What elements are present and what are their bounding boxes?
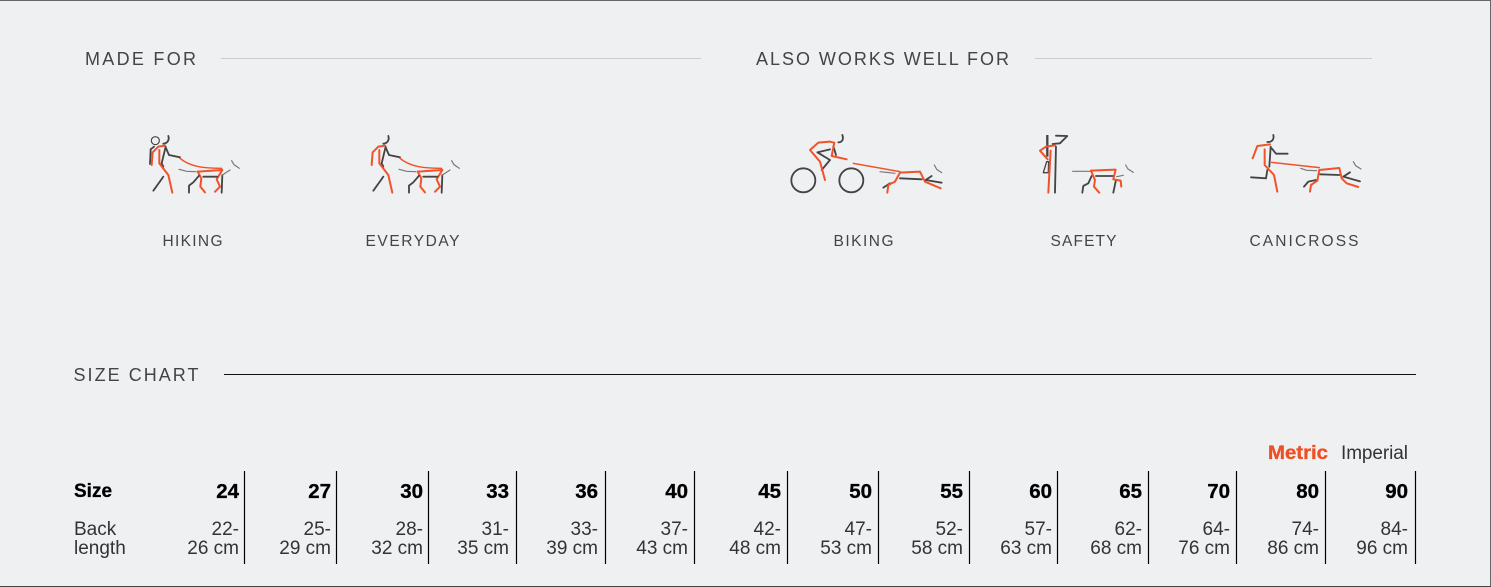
sizes row: 90 <box>1385 480 1408 503</box>
unit toggle: metric / imperial: Imperial <box>1341 443 1408 464</box>
heading: size chart: SIZE CHART <box>74 365 198 385</box>
back length row: 48 cm <box>729 538 781 559</box>
back length row: 32 cm <box>371 538 423 559</box>
label: hiking: HIKING <box>162 233 222 250</box>
icon: canicross <box>1251 135 1361 192</box>
back length row: 28- <box>396 519 423 540</box>
back length row: 96 cm <box>1356 538 1408 559</box>
sizes row: 45 <box>758 480 781 503</box>
unit toggle: metric / imperial <box>1268 443 1408 464</box>
icon: hiking <box>150 136 239 193</box>
sizes row: 27 <box>308 480 331 503</box>
unit toggle: metric / imperial: Metric <box>1268 443 1328 464</box>
back length row: 43 cm <box>636 538 688 559</box>
back length row: 64- <box>1203 519 1230 540</box>
back length row: 33- <box>571 519 598 540</box>
back length row: 52- <box>936 519 963 540</box>
column dividers <box>244 471 1416 564</box>
back length row: 47- <box>845 519 872 540</box>
row labels: length <box>74 538 126 559</box>
back length row: 53 cm <box>820 538 872 559</box>
heading: made for: MADE FOR <box>85 49 196 69</box>
sizes row: 60 <box>1029 480 1052 503</box>
heading: also works well for: ALSO WORKS WELL FOR <box>756 49 1009 69</box>
back length row: 68 cm <box>1090 538 1142 559</box>
label: safety: SAFETY <box>1050 233 1116 250</box>
back length row: 35 cm <box>457 538 509 559</box>
sizes row: 80 <box>1296 480 1319 503</box>
sizes row: 24 <box>216 480 240 503</box>
sizes row: 40 <box>665 480 688 503</box>
back length row: 26 cm <box>187 538 239 559</box>
back length row: 86 cm <box>1267 538 1319 559</box>
back length row: 58 cm <box>911 538 963 559</box>
back length row: 25- <box>304 519 331 540</box>
back length row <box>187 519 1408 559</box>
back length row: 39 cm <box>546 538 598 559</box>
sizes row <box>216 480 1408 503</box>
row labels: Back <box>74 519 117 540</box>
back length row: 22- <box>212 519 239 540</box>
icon: everyday <box>372 136 459 193</box>
sizes row: 33 <box>486 480 509 503</box>
back length row: 74- <box>1292 519 1319 540</box>
row labels <box>74 481 126 559</box>
size chart table <box>74 471 1416 564</box>
sizes row: 50 <box>849 480 872 503</box>
icon: safety <box>1040 135 1133 193</box>
icon: biking <box>791 135 942 193</box>
row labels: Size <box>74 481 112 502</box>
back length row: 31- <box>482 519 509 540</box>
sizes row: 30 <box>400 480 423 503</box>
sizes row: 36 <box>575 480 598 503</box>
back length row: 62- <box>1115 519 1142 540</box>
back length row: 42- <box>754 519 781 540</box>
back length row: 29 cm <box>279 538 331 559</box>
back length row: 57- <box>1025 519 1052 540</box>
back length row: 63 cm <box>1000 538 1052 559</box>
back length row: 84- <box>1381 519 1408 540</box>
label: canicross: CANICROSS <box>1250 233 1358 250</box>
back length row: 76 cm <box>1178 538 1230 559</box>
sizes row: 65 <box>1119 480 1142 503</box>
sizes row: 55 <box>940 480 963 503</box>
sizes row: 70 <box>1207 480 1230 503</box>
back length row: 37- <box>661 519 688 540</box>
label: everyday: EVERYDAY <box>366 233 460 250</box>
label: biking: BIKING <box>834 233 894 250</box>
